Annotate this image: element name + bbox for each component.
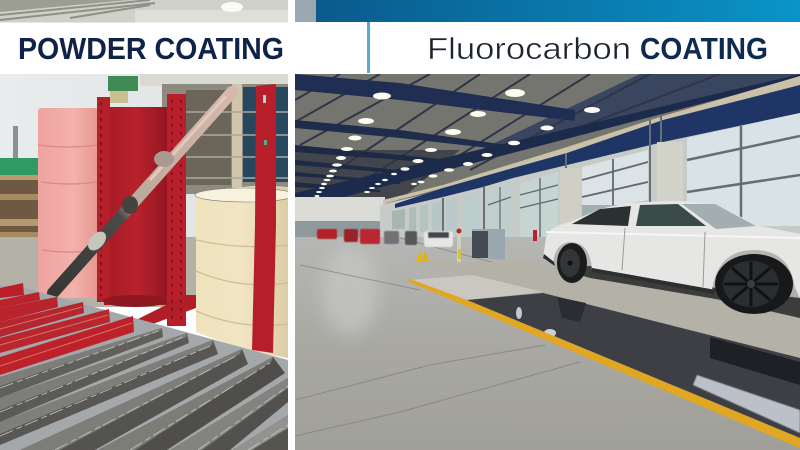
equipment box and cones bbox=[415, 228, 537, 264]
heading: fluorocarbon coating bbox=[427, 31, 768, 66]
yellow safety line bbox=[407, 279, 800, 449]
panel: fluorocarbon coating photo bbox=[295, 74, 800, 450]
panel: powder coating photo bbox=[0, 0, 295, 450]
black reflective mat bbox=[467, 293, 800, 438]
far parked cars bbox=[317, 229, 453, 247]
heading: fluorocarbon coating: Fluorocarbon bbox=[427, 31, 631, 66]
workshop background bbox=[0, 74, 288, 244]
back wall bbox=[295, 197, 385, 238]
pale floor plate bbox=[410, 275, 543, 300]
top-right colour band bbox=[295, 0, 800, 22]
coating rod bbox=[53, 92, 232, 293]
side wall with fascia bbox=[380, 76, 800, 240]
conveyor tray bbox=[0, 285, 288, 450]
windows bbox=[392, 113, 800, 242]
driving lane beside car bbox=[410, 262, 800, 358]
rear wheel bbox=[557, 243, 587, 283]
white car bbox=[543, 201, 800, 318]
red post bbox=[252, 84, 276, 353]
ceiling bbox=[295, 74, 800, 204]
floor seams bbox=[295, 238, 580, 436]
floor bbox=[0, 237, 196, 307]
ceiling strip bbox=[0, 0, 288, 24]
cream drum bbox=[195, 186, 295, 358]
floor reflection bbox=[322, 245, 378, 335]
pallets and green table bbox=[0, 158, 42, 237]
heading: powder coating: POWDER COATING bbox=[18, 31, 284, 66]
car shadow bbox=[556, 266, 800, 318]
concrete floor bbox=[295, 237, 800, 450]
heading: fluorocarbon coating: COATING bbox=[640, 31, 768, 66]
divider bbox=[367, 22, 370, 73]
red rollers bbox=[0, 283, 134, 375]
ceiling lights bbox=[314, 89, 600, 197]
grey rollers bbox=[0, 328, 288, 450]
title band bbox=[0, 22, 800, 74]
pink drums bbox=[38, 108, 98, 298]
red rack and panel bbox=[97, 94, 196, 326]
front wheel bbox=[715, 254, 793, 314]
